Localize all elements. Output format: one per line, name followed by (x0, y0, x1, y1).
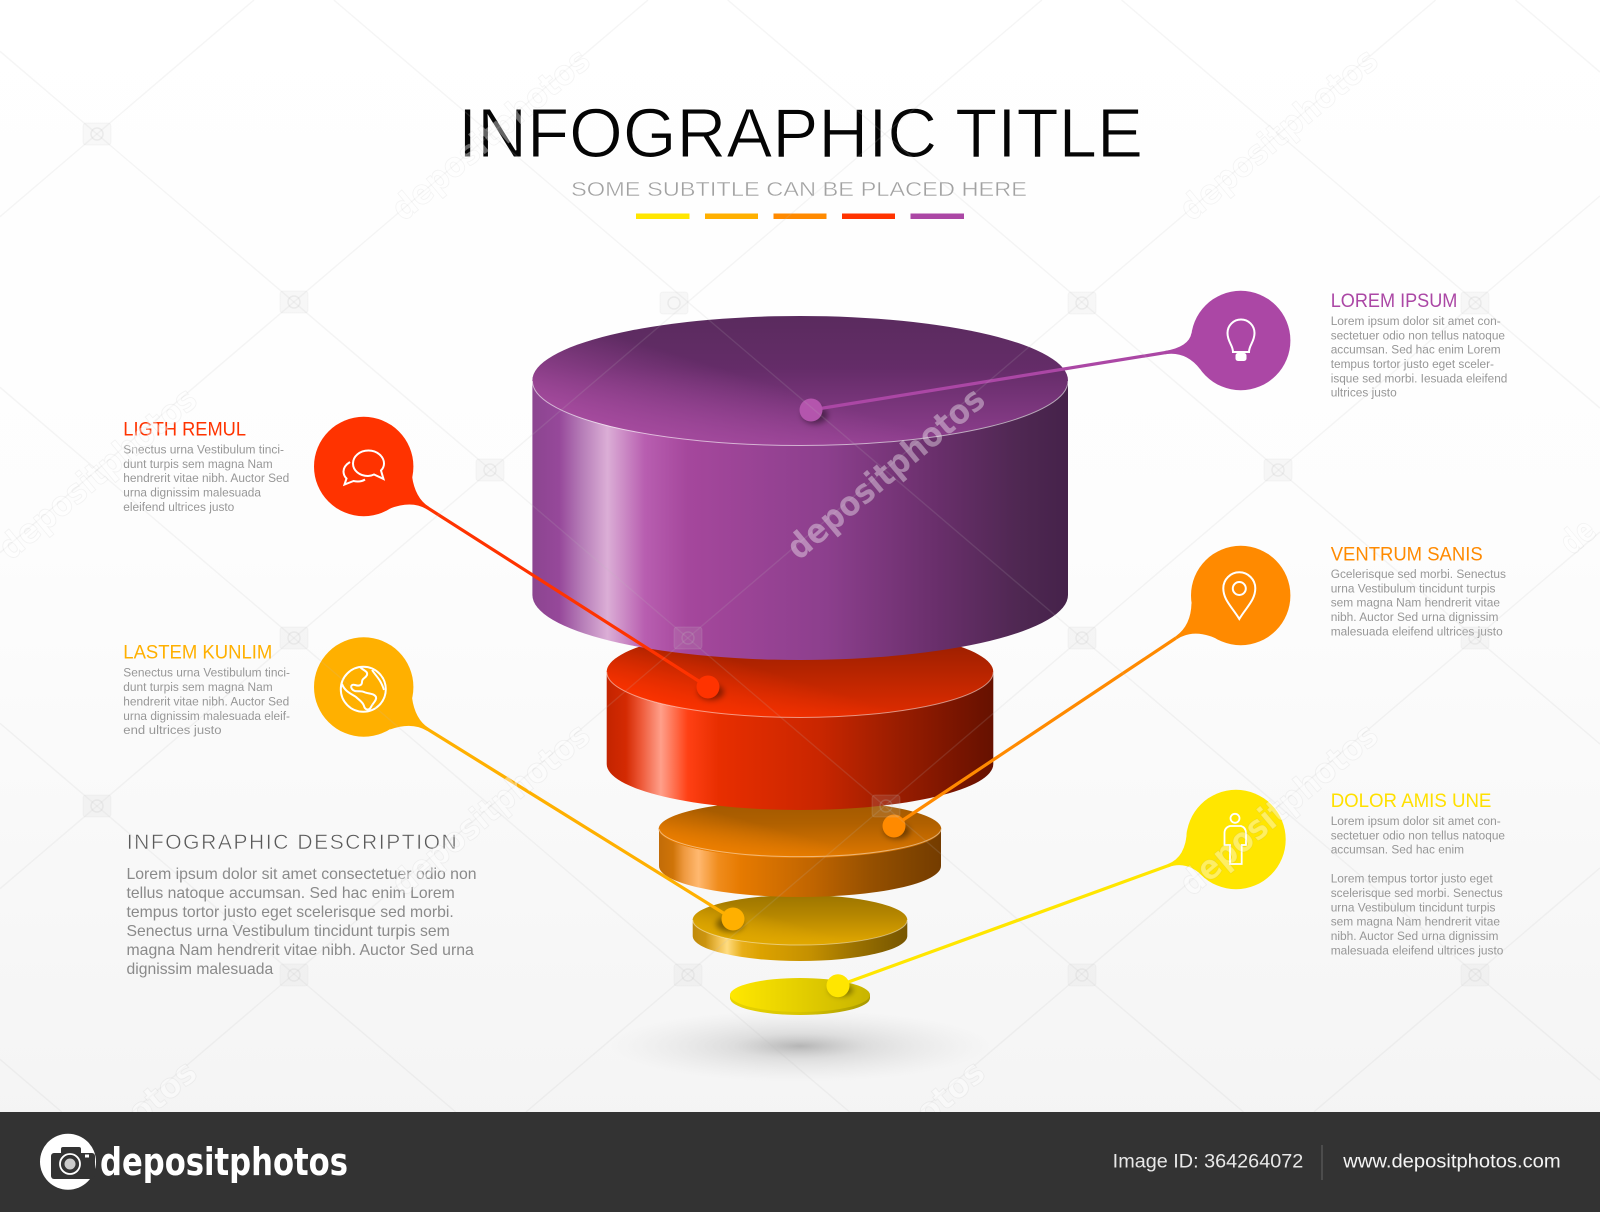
cylinder: purple level (532, 316, 1068, 660)
text block: Dolor Amis Une: Lorem ipsum dolor sit amet con- (1331, 814, 1501, 828)
text block: Ventrum Sanis: malesuada eleifend ultrices justo (1331, 624, 1503, 638)
footer bar (0, 1112, 1600, 1212)
text block: Lastem Kunlim: urna dignissim malesuada eleif- (123, 709, 290, 723)
text block: Ligth Remul: dunt turpis sem magna Nam (123, 457, 273, 471)
text block: Ventrum Sanis: VENTRUM SANIS (1331, 544, 1483, 566)
logo: wordmark: depositphotos (100, 1140, 348, 1184)
cylinder: orange level (659, 800, 941, 897)
text block: Ligth Remul: LIGTH REMUL (123, 420, 246, 440)
watermark overlay: depositphotos (1172, 40, 1386, 229)
title: INFOGRAPHIC TITLE (458, 94, 1143, 172)
text block: infographic description: Senectus urna Vestibulum tincidunt turpis sem (126, 923, 450, 940)
cylinder: gold level (693, 895, 907, 961)
callout: red pin with chat icon (314, 417, 720, 698)
text block: Ligth Remul: Snectus urna Vestibulum tinci- (123, 442, 284, 456)
text block: Ventrum Sanis: nibh. Auctor Sed urna dignissim (1331, 610, 1498, 624)
callout: purple pin with lightbulb icon (800, 291, 1290, 422)
text block: Dolor Amis Une: Lorem tempus tortor justo eget (1331, 872, 1493, 886)
watermark overlay: depositphotos (384, 715, 598, 904)
text block: Ligth Remul: hendrerit vitae nibh. Auctor Sed (123, 471, 289, 485)
ground shadow (610, 1010, 990, 1082)
text block: Dolor Amis Une: urna Vestibulum tincidunt turpis (1331, 900, 1495, 914)
text block: Ventrum Sanis: urna Vestibulum tincidunt turpis (1331, 581, 1495, 595)
dot shadows (698, 406, 910, 996)
logo: camera badge (40, 1134, 96, 1190)
text block: infographic description: INFOGRAPHIC DESCRIPTION (127, 831, 457, 854)
icon: person (1224, 814, 1246, 864)
text block: Lastem Kunlim: LASTEM KUNLIM (123, 642, 272, 664)
watermark overlay: depositphotos (384, 40, 598, 229)
text block: Lastem Kunlim: hendrerit vitae nibh. Auctor Sed (123, 694, 289, 708)
text block: Ventrum Sanis: Gcelerisque sed morbi. Senectus (1331, 567, 1506, 581)
text block: infographic description (126, 831, 476, 978)
icon: location marker (1223, 572, 1255, 619)
text block: Lorem Ipsum: Lorem ipsum dolor sit amet con- (1331, 314, 1501, 328)
text block: Ventrum Sanis: sem magna Nam hendrerit vitae (1331, 596, 1500, 610)
text block: Lorem Ipsum: accumsan. Sed hac enim Lorem (1331, 343, 1501, 357)
text block: Dolor Amis Une: scelerisque sed morbi. Senectus (1331, 886, 1503, 900)
watermark overlay: depositphotos (1172, 715, 1386, 904)
icon: chat bubbles (344, 450, 384, 484)
watermark overlay: depositphotos (779, 379, 993, 568)
text block: infographic description: dignissim malesuada (126, 961, 273, 978)
text block: Lorem Ipsum: sectetuer odio non tellus natoque (1331, 328, 1505, 342)
text block: infographic description: magna Nam hendrerit vitae nibh. Auctor Sed urna (126, 942, 474, 959)
text block: Ligth Remul: eleifend ultrices justo (123, 500, 235, 514)
text block: Dolor Amis Une: malesuada eleifend ultrices justo (1331, 943, 1504, 957)
colour bars (636, 214, 964, 219)
text block: Lastem Kunlim: end ultrices justo (123, 723, 222, 737)
text block: infographic description: tellus natoque accumsan. Sed hac enim Lorem (126, 885, 455, 902)
text block: infographic description: Lorem ipsum dolor sit amet consectetuer odio non (126, 866, 476, 883)
watermark overlay: photos (85, 1052, 205, 1162)
cylinder: red level (607, 626, 993, 810)
subtitle: SOME SUBTITLE CAN BE PLACED HERE (571, 178, 1027, 201)
text block: Lorem Ipsum: ultrices justo (1331, 386, 1397, 400)
text block: Dolor Amis Une: sem magna Nam hendrerit vitae (1331, 915, 1500, 929)
callout: amber pin with globe icon (314, 637, 744, 930)
text block: Dolor Amis Une: sectetuer odio non tellus natoque (1331, 828, 1505, 842)
text block: Lorem Ipsum (1331, 291, 1507, 400)
callout: yellow pin with person icon (826, 790, 1286, 997)
text block: Lorem Ipsum: LOREM IPSUM (1331, 291, 1457, 312)
website: www.depositphotos.com (1342, 1151, 1561, 1173)
text block: Lastem Kunlim (123, 642, 290, 737)
text block: Lorem Ipsum: tempus tortor justo eget sceler- (1331, 357, 1494, 371)
cylinder: yellow level (730, 978, 870, 1015)
icon: globe (341, 667, 386, 712)
watermark overlay: photos (873, 1052, 993, 1162)
text block: Dolor Amis Une: accumsan. Sed hac enim (1331, 843, 1464, 857)
text block: Ligth Remul (123, 420, 289, 514)
text block: Ligth Remul: urna dignissim malesuada (123, 486, 261, 500)
text block: Lastem Kunlim: Senectus urna Vestibulum tinci- (123, 666, 290, 680)
callout: orange pin with location icon (882, 546, 1290, 838)
icon: lightbulb (1228, 320, 1254, 361)
text block: Ventrum Sanis (1331, 544, 1506, 638)
text block: infographic description: tempus tortor justo eget scelerisque sed morbi. (126, 904, 454, 921)
text block: Lastem Kunlim: dunt turpis sem magna Nam (123, 680, 273, 694)
image id: Image ID: 364264072 (1113, 1151, 1303, 1173)
text block: Dolor Amis Une: DOLOR AMIS UNE (1331, 791, 1491, 812)
text block: Dolor Amis Une: nibh. Auctor Sed urna dignissim (1331, 929, 1498, 943)
text block: Lorem Ipsum: isque sed morbi. Iesuada eleifend (1331, 371, 1507, 385)
text block: Dolor Amis Une (1331, 791, 1505, 957)
